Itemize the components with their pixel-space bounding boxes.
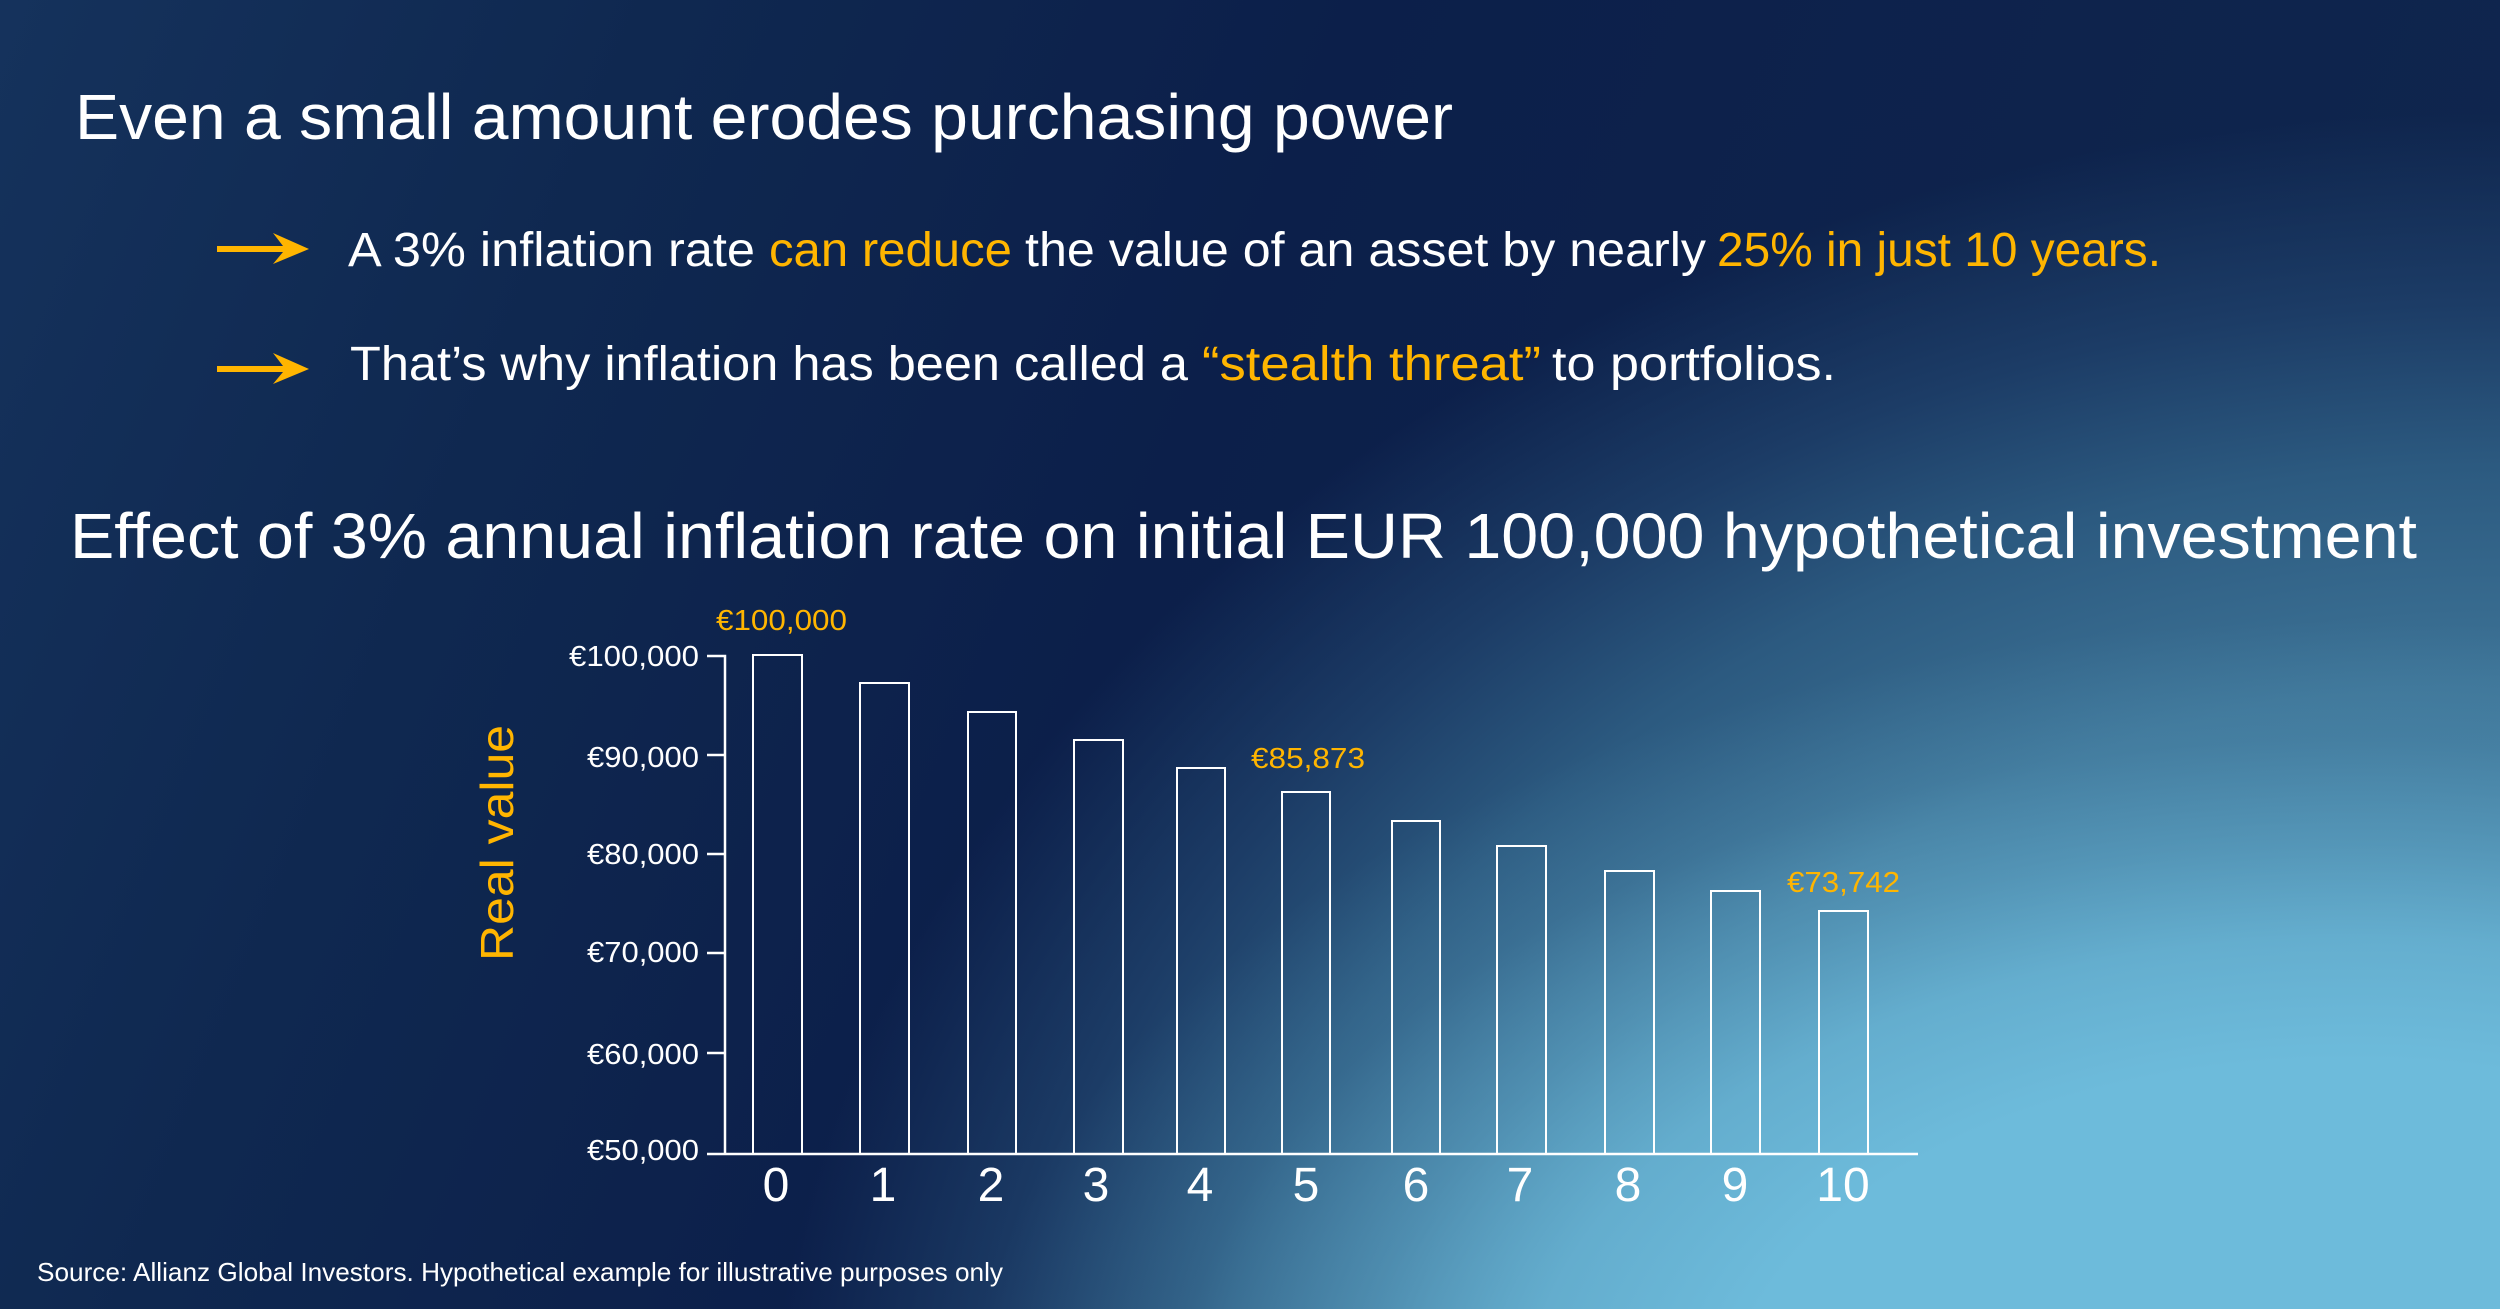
bullet 1 [217,224,2161,277]
chart heading: Effect of 3% annual inflation rate on initial EUR 100,000 hypothetical investment [70,500,2417,572]
y axis labels: €80,000 [587,839,699,871]
x axis labels: 9 [1722,1159,1748,1212]
title: Even a small amount erodes purchasing power [75,81,1453,153]
y axis labels: €50,000 [587,1135,699,1167]
bullet 2 text: “stealth threat” [1202,338,1541,391]
x axis labels: 2 [978,1159,1004,1212]
bullet 1 text: the value of an asset by nearly [1025,224,1706,277]
bullet 1 text: A 3% inflation rate [348,224,755,277]
axes and ticks [707,656,1918,1154]
value labels: €100,000 [716,605,847,637]
source note: Source: Allianz Global Investors. Hypothetical example for illustrative purposes only [37,1257,1003,1287]
x axis labels: 3 [1083,1159,1109,1212]
bars [753,655,1868,1154]
icon: arrow [217,353,309,384]
x axis labels: 0 [763,1159,789,1212]
bullet 2 text: That’s why inflation has been called a [350,338,1188,391]
bullet 2 [217,338,1836,391]
y axis title: Real value [471,725,523,961]
value labels: €85,873 [1251,743,1365,775]
x axis labels: 10 [1816,1159,1870,1212]
x axis labels: 4 [1187,1159,1213,1212]
x axis labels: 5 [1293,1159,1319,1212]
icon: arrow [217,233,309,264]
bullet 1 text: 25% in just 10 years. [1717,224,2161,277]
y axis labels: €70,000 [587,937,699,969]
bar chart [471,605,1918,1212]
bullet 2 text: to portfolios. [1552,338,1836,391]
value labels [716,605,1900,899]
value labels: €73,742 [1787,867,1900,899]
x axis labels: 7 [1507,1159,1533,1212]
x axis labels: 8 [1615,1159,1641,1212]
x axis labels: 1 [870,1159,896,1212]
y axis labels: €60,000 [587,1039,699,1071]
y axis labels [569,641,699,1167]
x axis labels [763,1159,1870,1212]
y axis labels: €90,000 [587,742,699,774]
y axis labels: €100,000 [569,641,699,673]
x axis labels: 6 [1403,1159,1429,1212]
bullet 1 text: can reduce [769,224,1012,277]
